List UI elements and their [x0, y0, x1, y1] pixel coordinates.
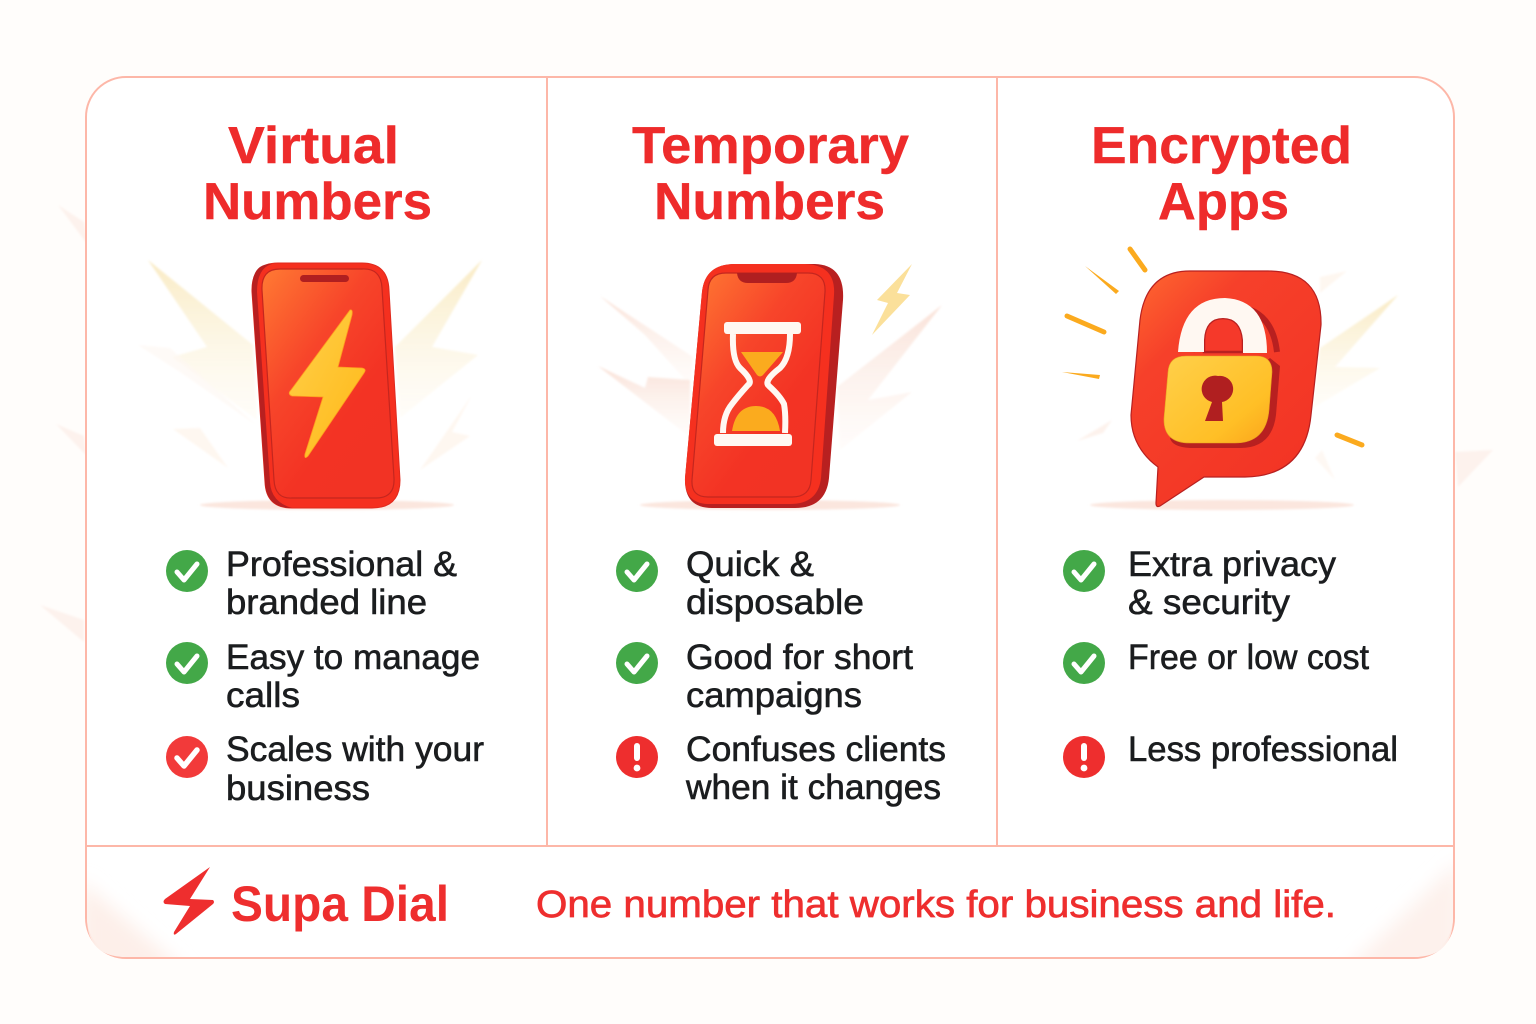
check item: extra privacy and security: Extra privacy [1128, 545, 1337, 584]
footer band [164, 867, 1336, 935]
tagline: One number that works for business and life. [536, 884, 1336, 926]
check item: professional and branded line: branded line [226, 583, 427, 622]
check item: easy to manage calls: calls [226, 676, 300, 715]
warning item: confuses clients [616, 730, 946, 807]
check item: free or low cost: Free or low cost [1128, 638, 1369, 677]
heading: encrypted apps: Apps [1158, 173, 1289, 231]
red check item: scales with your business: business [226, 769, 370, 808]
check item: extra privacy and security: & security [1128, 583, 1291, 622]
check item: good for short campaigns [616, 638, 913, 715]
heading: virtual numbers: Virtual [228, 117, 399, 175]
check item: easy to manage calls: Easy to manage [226, 638, 480, 677]
heading: encrypted apps: Encrypted [1091, 117, 1352, 175]
check item: good for short campaigns: Good for short [686, 638, 913, 677]
check item: quick and disposable [616, 545, 864, 622]
red check item: scales with your business [166, 730, 484, 808]
panel: virtual numbers [138, 117, 484, 808]
panel: encrypted apps [1062, 117, 1398, 778]
red check item: scales with your business: Scales with your [226, 730, 484, 769]
illustration: phone with lightning bolt [138, 260, 482, 510]
check item: extra privacy and security [1063, 545, 1337, 622]
brand name: Supa Dial [231, 876, 449, 932]
warning item: less professional [1063, 730, 1398, 778]
check item: professional and branded line: Professional & [226, 545, 457, 584]
heading: temporary numbers: Numbers [654, 173, 885, 231]
check item: quick and disposable: Quick & [686, 545, 814, 584]
heading: temporary numbers: Temporary [632, 117, 909, 175]
check item: easy to manage calls [166, 638, 480, 715]
heading: temporary numbers [632, 117, 909, 231]
check item: good for short campaigns: campaigns [686, 676, 862, 715]
heading: virtual numbers [203, 117, 432, 231]
illustration: chat bubble with padlock [1062, 249, 1398, 510]
main card [86, 77, 1454, 958]
background faint bolts [40, 205, 1493, 642]
icon: supa dial bolt [164, 867, 214, 935]
benefit list: encrypted apps [1063, 545, 1398, 778]
benefit list: temporary numbers [616, 545, 946, 807]
check item: professional and branded line [166, 545, 457, 622]
warning item: confuses clients: when it changes [685, 768, 941, 807]
warning item: less professional: Less professional [1128, 730, 1398, 769]
warning item: confuses clients: Confuses clients [686, 730, 946, 769]
check item: quick and disposable: disposable [686, 583, 864, 622]
illustration: phone with hourglass [598, 264, 942, 510]
benefit list: virtual numbers [166, 545, 484, 808]
check item: free or low cost [1063, 638, 1369, 684]
heading: virtual numbers: Numbers [203, 173, 432, 231]
panel: temporary numbers [598, 117, 946, 807]
footer corner tints [80, 860, 1460, 975]
heading: encrypted apps [1091, 117, 1352, 231]
